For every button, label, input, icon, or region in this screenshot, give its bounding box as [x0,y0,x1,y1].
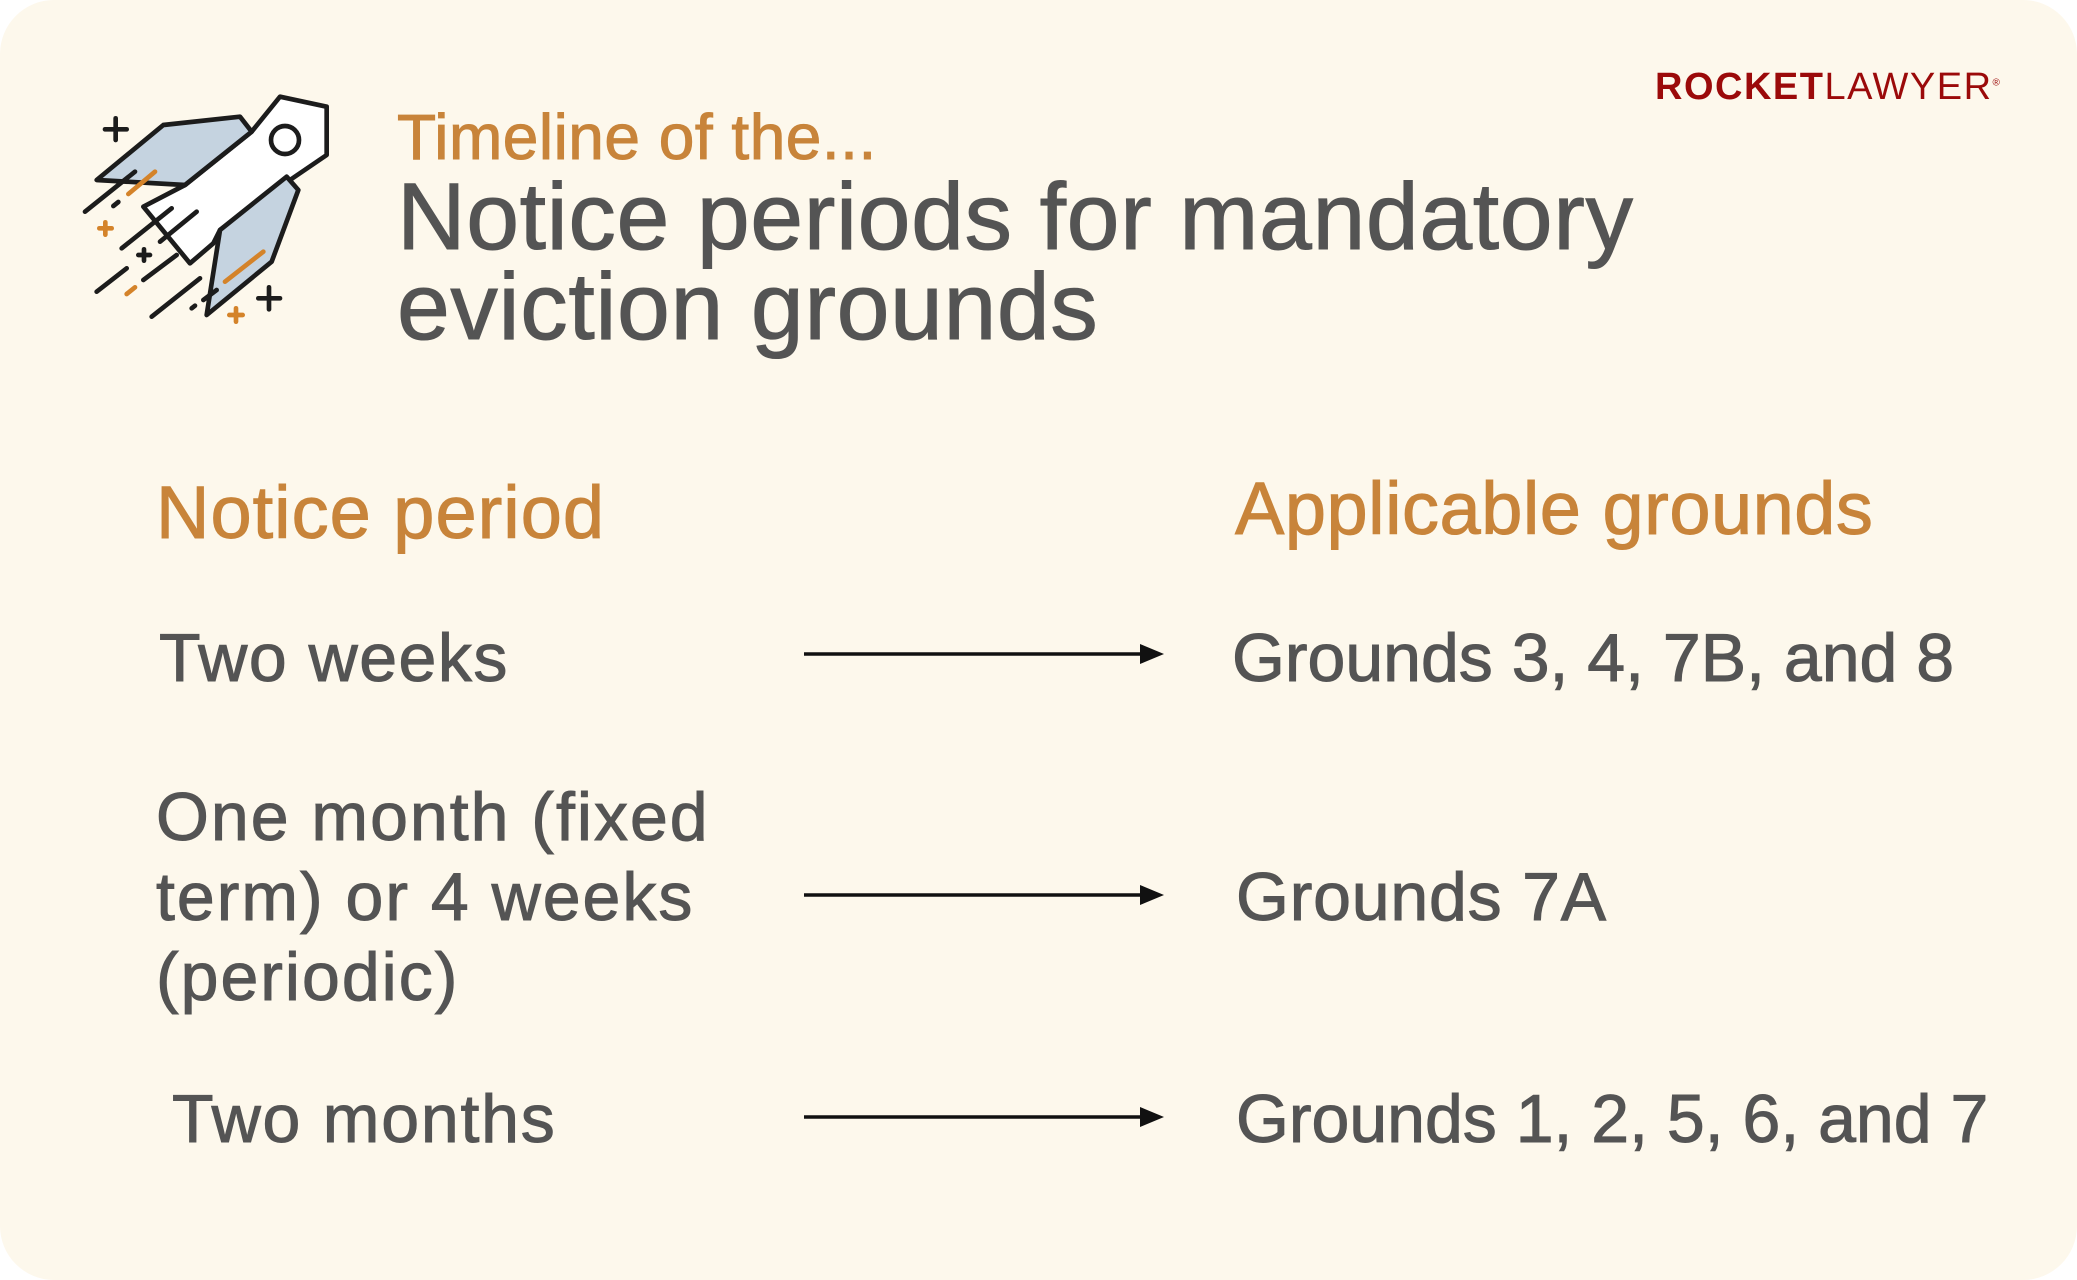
row 1 period: Two weeks [159,620,509,696]
title: Notice periods for mandatory [397,164,1634,270]
arrow 1 [804,644,1164,664]
row 3 period: Two months [172,1081,557,1157]
heading: applicable grounds: Applicable grounds [1235,467,1873,550]
row 2 period: One month (fixed [156,779,710,855]
row 2 period: term) or 4 weeks [156,859,694,935]
logo: ROCKETLAWYER® [1655,66,2001,108]
subtitle: Timeline of the... [397,101,877,173]
arrow 3 [804,1107,1164,1127]
title: eviction grounds [397,254,1098,360]
row 2 period: (periodic) [156,939,459,1015]
arrow 2 [804,885,1164,905]
row 2 period [156,779,710,1015]
icon: rocket [82,94,329,324]
row 1 grounds: Grounds 3, 4, 7B, and 8 [1232,620,1954,696]
heading: notice period: Notice period [156,471,605,554]
row 2 grounds: Grounds 7A [1236,859,1607,935]
title [397,164,1634,360]
row 3 grounds: Grounds 1, 2, 5, 6, and 7 [1236,1081,1988,1157]
